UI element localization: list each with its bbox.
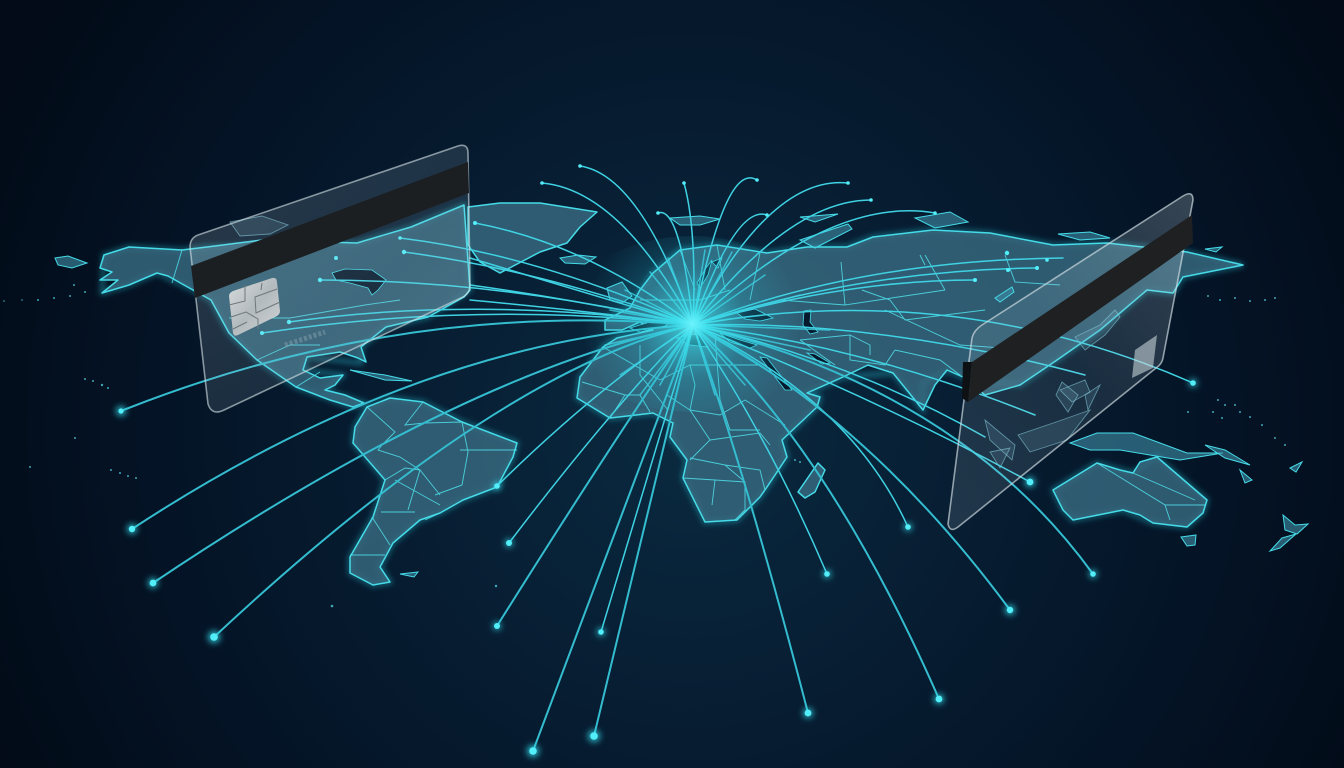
Hudson Bay bbox=[332, 269, 386, 295]
New Zealand bbox=[1270, 515, 1308, 551]
central hub glow bbox=[562, 236, 822, 412]
west arcs over North America bbox=[262, 223, 693, 333]
scattered island dots bbox=[3, 284, 1286, 607]
South America bbox=[350, 398, 517, 585]
southeast and east arcs bbox=[693, 258, 1193, 610]
map glow halo bbox=[102, 205, 1243, 585]
short radial rays around the hub bbox=[605, 250, 830, 395]
Madagascar bbox=[798, 463, 825, 498]
Australia borders bbox=[1097, 463, 1205, 520]
North America bbox=[100, 205, 470, 407]
Japan and East Asia islands bbox=[985, 287, 1120, 468]
Mediterranean and inland seas bbox=[630, 258, 830, 390]
Australia bbox=[1053, 457, 1207, 527]
right credit card bbox=[948, 194, 1193, 529]
endpoint glows bbox=[116, 379, 1197, 757]
card glass body bbox=[190, 145, 470, 412]
Tasmania bbox=[1181, 535, 1196, 546]
Greenland bbox=[468, 203, 597, 273]
Alaska and Caribbean islands bbox=[55, 216, 418, 577]
New Guinea and Pacific islands bbox=[1070, 433, 1302, 483]
card glass body bbox=[948, 194, 1193, 529]
network lines from hub bbox=[116, 164, 1197, 757]
Eurasia borders bbox=[640, 245, 1060, 375]
endpoint dots bbox=[118, 164, 1196, 755]
left credit card bbox=[190, 145, 470, 412]
EMV chip bbox=[229, 278, 280, 336]
south arcs bbox=[533, 325, 939, 751]
chip bbox=[1132, 335, 1157, 378]
southwest arcs bbox=[121, 320, 693, 637]
world map bbox=[3, 203, 1308, 607]
UK bbox=[607, 282, 632, 303]
Arctic islands bbox=[670, 212, 1222, 252]
Africa borders bbox=[582, 335, 785, 520]
magnetic stripe bbox=[191, 162, 469, 298]
magnetic stripe bbox=[968, 215, 1193, 402]
South America borders bbox=[350, 402, 517, 555]
Iceland bbox=[560, 255, 596, 264]
north arcs bbox=[542, 166, 935, 325]
North America borders bbox=[172, 250, 400, 387]
embossed number bbox=[285, 332, 325, 345]
Africa and Eurasia bbox=[577, 230, 1243, 522]
stripe side edge bbox=[962, 362, 972, 402]
